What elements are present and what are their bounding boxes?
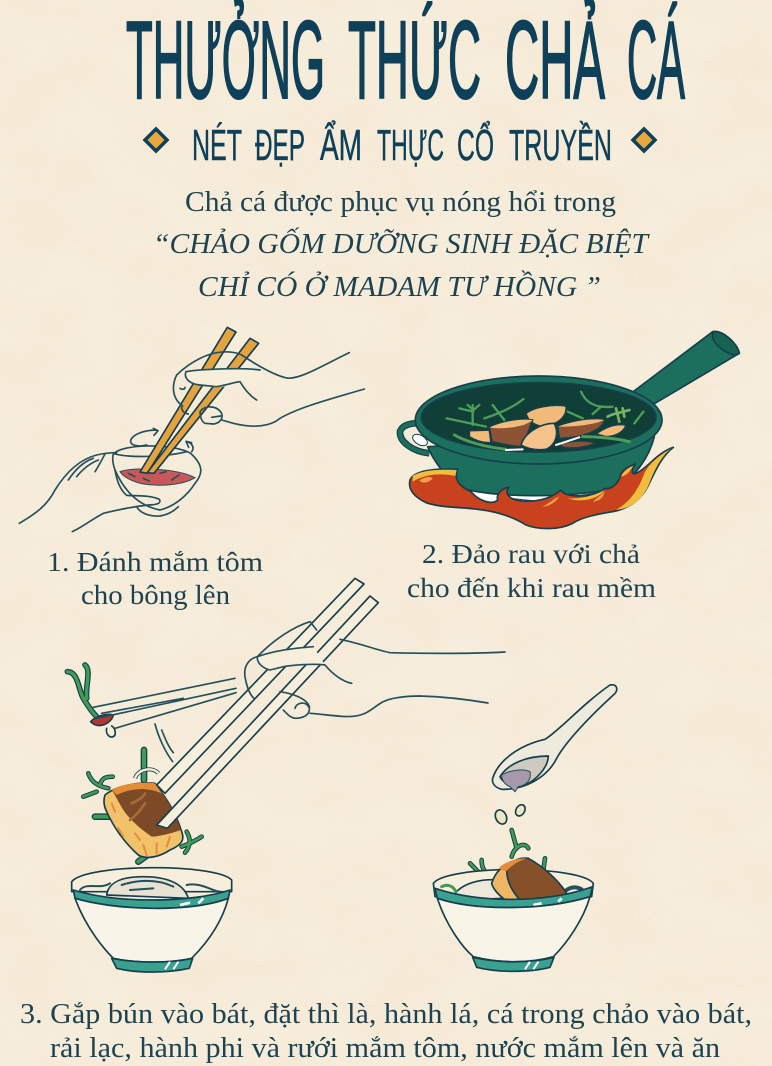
illustration: chopsticks picking herb and fish over left bowl: [67, 578, 505, 972]
bowl with noodles: [72, 868, 232, 972]
step 1 caption: [47, 546, 263, 610]
subtitle text: [192, 119, 612, 170]
icon: right diamond: [633, 129, 655, 151]
flame: [410, 447, 673, 529]
step 1 caption: cho bông lên: [81, 579, 230, 610]
icon: left diamond: [145, 129, 167, 151]
side lug: [400, 423, 429, 453]
step 1 caption: 1. Đánh mắm tôm: [47, 546, 263, 577]
hand: [257, 647, 325, 670]
subtitle text: THỰC: [377, 121, 444, 170]
bowl outline: [113, 446, 201, 510]
handle: [631, 332, 739, 407]
herb behind fish: [95, 750, 150, 862]
intro text block: [153, 187, 651, 303]
subtitle with diamonds: [145, 119, 655, 170]
step 2 caption: 2. Đảo rau với chả: [422, 538, 640, 569]
subtitle text: ĐẸP: [255, 121, 305, 170]
title: CHẢ: [505, 0, 605, 122]
subtitle text: TRUYỀN: [509, 120, 612, 170]
step 2 caption: cho đến khi rau mềm: [407, 572, 656, 603]
intro text block: CHỈ CÓ Ở MADAM TƯ HỒNG ”: [198, 271, 601, 303]
fish pieces: [526, 405, 566, 427]
upper hand: [186, 368, 262, 387]
subtitle text: NÉT: [192, 121, 242, 170]
subtitle text: CỔ: [457, 119, 494, 170]
fish piece: [104, 783, 183, 857]
subtitle text: ẨM: [320, 119, 362, 170]
herbs in pan: [447, 392, 643, 427]
sauce in bowl: [120, 469, 195, 485]
step 3 caption: rải lạc, hành phi và rưới mắm tôm, nước mắm lên và ăn: [50, 1033, 720, 1064]
chopsticks: [157, 578, 364, 793]
herb stalk held by chopsticks: [67, 665, 115, 737]
bowl: [433, 858, 593, 971]
title: THƯỞNG: [126, 0, 325, 122]
falling peanuts: [493, 808, 509, 826]
faded chopsticks motion: [93, 678, 236, 728]
intro text block: “CHẢO GỐM DƯỠNG SINH ĐẶC BIỆT: [153, 228, 651, 260]
falling peanut small: [514, 803, 527, 818]
chopsticks: [140, 327, 236, 473]
swirl arrows: [131, 428, 193, 452]
step 3 caption: [20, 999, 752, 1064]
pan rim: [415, 376, 662, 464]
lower hand: [19, 453, 178, 532]
herbs above bowl: [470, 830, 545, 883]
intro text block: Chả cá được phục vụ nóng hổi trong: [185, 187, 616, 218]
illustration: spoon pouring sauce over right bowl: [433, 685, 617, 971]
motion lines: [155, 724, 173, 762]
white glow under pan: [461, 480, 616, 504]
title: THỨC: [348, 0, 481, 122]
illustration: green pan over flame: [400, 332, 739, 529]
illustration: hands whisking shrimp paste: [19, 327, 364, 532]
spoon: [492, 685, 617, 792]
step 3 caption: 3. Gắp bún vào bát, đặt thì là, hành lá, cá trong chảo vào bát,: [20, 999, 752, 1030]
step 2 caption: [407, 538, 656, 603]
pan body: [428, 437, 654, 496]
fish in bowl: [492, 858, 567, 903]
